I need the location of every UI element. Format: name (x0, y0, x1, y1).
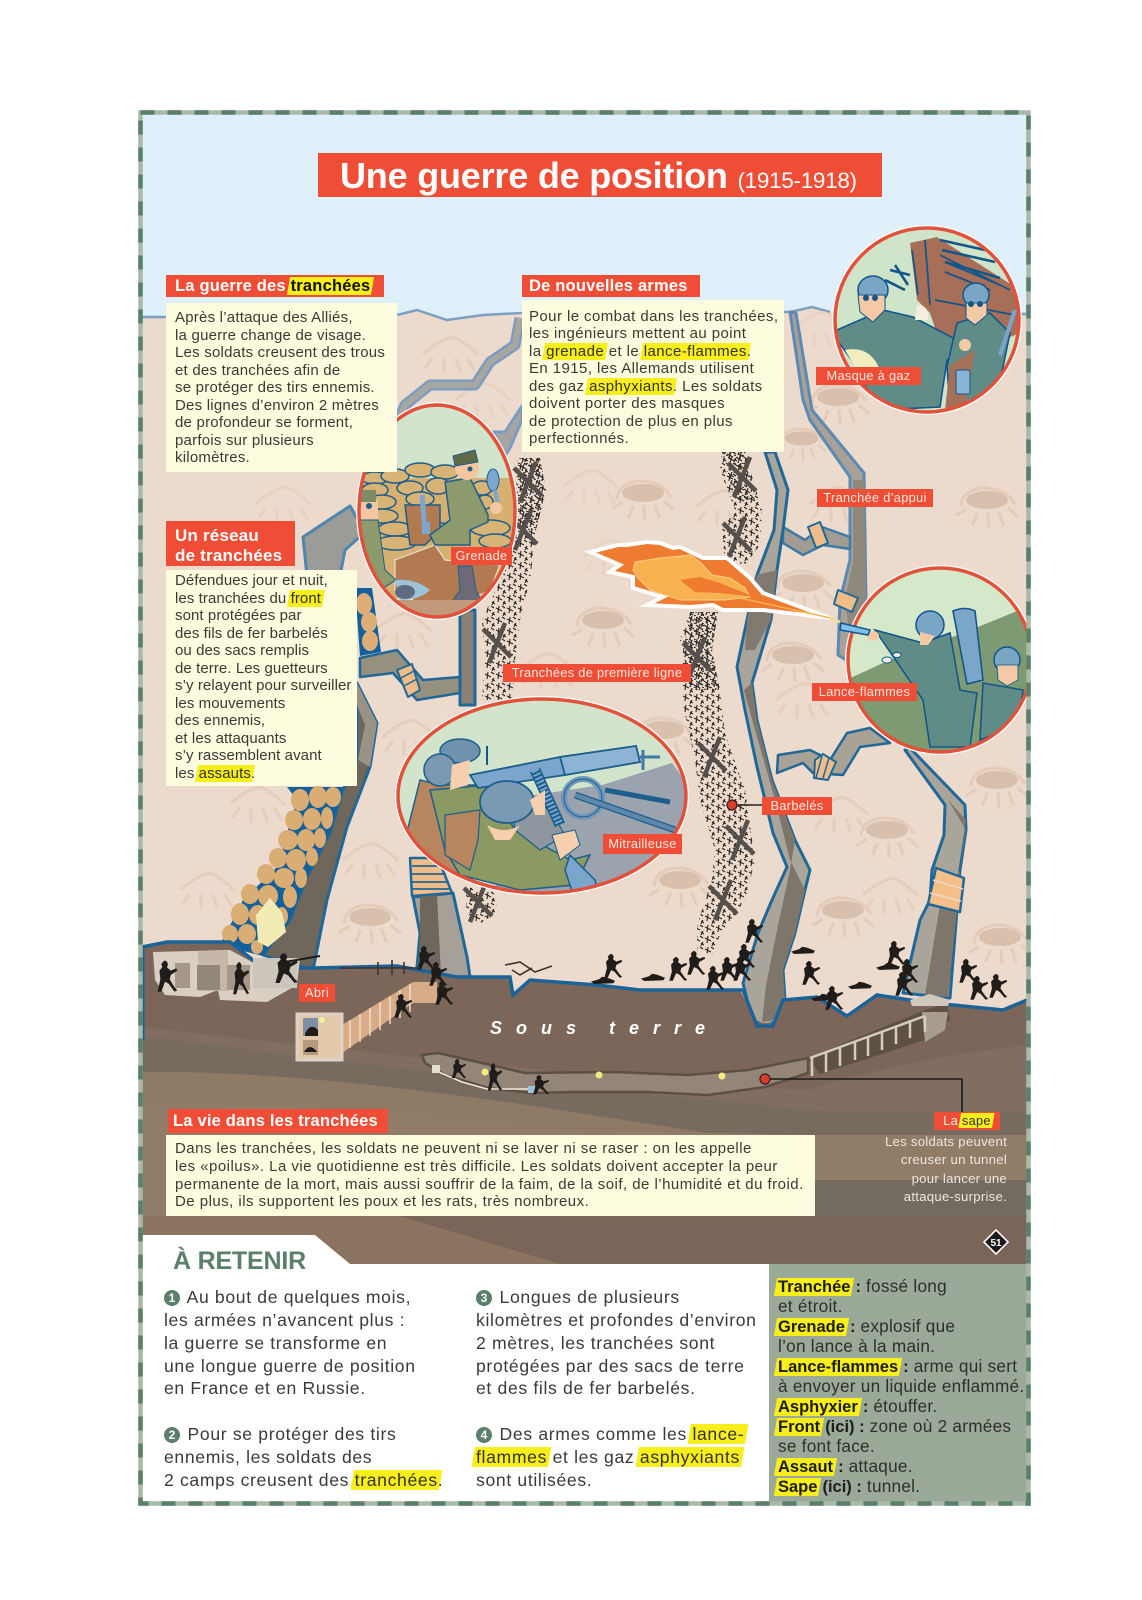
text block: la guerre des tranchées: la guerre change de visage. (175, 327, 366, 344)
soldiers on the battlefield (340, 919, 1007, 1010)
text block: retenir point 1: en France et en Russie. (164, 1378, 366, 1398)
label: mitrailleuse (603, 834, 682, 854)
text block: retenir point 4: 4 (481, 1428, 487, 1442)
text block: la guerre des tranchées: Les soldats creusent des trous (175, 344, 385, 361)
sky and soil (142, 114, 1027, 1020)
text block: la vie dans les tranchées: Dans les tranchées, les soldats ne peuvent ni se laver ni se raser : on les appelle (175, 1140, 752, 1157)
text block: retenir point 3: protégées par des sacs de terre (476, 1356, 745, 1376)
illustration: trench battlefield landscape (138, 110, 1032, 1506)
text block: de nouvelles armes: doivent porter des masques (529, 395, 725, 412)
barbed wire belts (464, 452, 762, 955)
text block: retenir point 4: flammes et les gaz asphyxiants (476, 1447, 740, 1467)
text block: retenir point 2 (164, 1424, 443, 1490)
text block: de nouvelles armes: En 1915, les Allemands utilisent (529, 360, 754, 377)
panel: glossary: Tranchée : fossé long (778, 1276, 947, 1296)
label: masque à gaz: Masque à gaz (826, 368, 910, 383)
title: Une guerre de position (1915-1918) (340, 155, 857, 196)
text block: retenir point 3: 2 mètres, les tranchées sont (476, 1333, 715, 1353)
vignette: machine gun (395, 695, 692, 900)
text block: retenir point 2: 2 (169, 1428, 175, 1442)
text block: retenir point 2: ennemis, les soldats des (164, 1447, 372, 1467)
panel: glossary: l’on lance à la main. (778, 1336, 935, 1356)
center long trench (737, 452, 810, 1026)
text block: un réseau de tranchées: ou des sacs remplis (175, 642, 309, 659)
white recap background (142, 1235, 1027, 1503)
text block: la vie dans les tranchées: permanente de la mort, mais aussi souffrir de la faim, de la soif, de l’humidité et du froid. (175, 1176, 804, 1193)
heading: à retenir: À RETENIR (173, 1247, 306, 1275)
text block: la guerre des tranchées: et des tranchées afin de (175, 362, 340, 379)
panel: glossary: et étroit. (778, 1296, 843, 1316)
text block: de nouvelles armes (522, 300, 784, 452)
label: tranchées de première ligne: Tranchées de première ligne (512, 665, 682, 680)
text block: un réseau de tranchées: des ennemis, (175, 712, 265, 729)
text block: un réseau de tranchées: s’y rassemblent avant (175, 747, 322, 764)
text block: un réseau de tranchées: de terre. Les guetteurs (175, 660, 328, 677)
panel: glossary: Asphyxier : étouffer. (778, 1396, 937, 1416)
callout line: barbelés (727, 800, 764, 810)
vignette: grenade (355, 400, 525, 625)
underground layers (142, 942, 1027, 1270)
text block: la guerre des tranchées: parfois sur plusieurs (175, 432, 314, 449)
text block: un réseau de tranchées: s’y relayent pour surveiller (175, 677, 351, 694)
text block: retenir point 1: une longue guerre de position (164, 1356, 416, 1376)
text block: retenir point 4: sont utilisées. (476, 1470, 592, 1490)
text block: sape explanation (885, 1134, 1007, 1204)
left sandbag trench (263, 683, 377, 970)
heading: de nouvelles armes: De nouvelles armes (529, 277, 688, 295)
panel: glossary: Sape (ici) : tunnel. (778, 1476, 920, 1496)
text block: retenir point 2: Pour se protéger des tirs (188, 1424, 396, 1444)
text block: la vie dans les tranchées: De plus, ils supportent les poux et les rats, très nombreux. (175, 1193, 589, 1210)
text block: la guerre des tranchées: de profondeur se forment, (175, 414, 353, 431)
text block: de nouvelles armes: les ingénieurs mettent au point (529, 325, 746, 342)
text block: de nouvelles armes: Pour le combat dans les tranchées, (529, 308, 778, 324)
label: abri (299, 984, 335, 1002)
heading: un réseau de tranchées: de tranchées (175, 546, 282, 565)
dashed frame (140, 112, 1028, 1504)
text block: retenir point 3: et des fils de fer barbelés. (476, 1378, 696, 1398)
text block: un réseau de tranchées: des fils de fer barbelés (175, 625, 328, 642)
text block: retenir point 3 (476, 1287, 757, 1398)
label: barbelés: Barbelés (771, 798, 823, 813)
text block: retenir point 1: la guerre se transforme en (164, 1333, 387, 1353)
text block: un réseau de tranchées (166, 570, 357, 786)
sape tunnel (422, 994, 950, 1095)
text block: retenir point 3: Longues de plusieurs (500, 1287, 680, 1307)
heading: la vie dans les tranchées: La vie dans les tranchées (173, 1112, 378, 1130)
text block: un réseau de tranchées: et les attaquants (175, 730, 286, 747)
shelter with stairs (297, 982, 437, 1060)
text block: retenir point 1: les armées n’avancent plus : (164, 1310, 405, 1330)
bunker with soldiers (153, 950, 320, 1002)
label: tranchée d'appui: Tranchée d’appui (823, 490, 927, 505)
text block: retenir point 3: kilomètres et profondes d’environ (476, 1310, 757, 1330)
text block: la vie dans les tranchées (166, 1135, 815, 1216)
text block: la guerre des tranchées (166, 303, 397, 472)
heading: un réseau de tranchées (166, 521, 295, 566)
panel: glossary: Assaut : attaque. (778, 1456, 913, 1476)
text block: de nouvelles armes: de protection de plus en plus (529, 413, 733, 430)
panel: glossary: se font face. (778, 1436, 875, 1456)
vignette: flamethrower (840, 560, 1035, 760)
text block: de nouvelles armes: perfectionnés. (529, 430, 629, 447)
label: la sape (934, 1112, 1000, 1130)
heading: un réseau de tranchées: Un réseau (175, 526, 259, 545)
text block: un réseau de tranchées: les tranchées du front (175, 590, 321, 607)
text block: retenir point 1 (164, 1287, 416, 1398)
craters (181, 313, 1030, 963)
panel: glossary: à envoyer un liquide enflammé. (778, 1376, 1024, 1396)
text block: un réseau de tranchées: Défendues jour et nuit, (175, 572, 328, 589)
heading: la vie dans les tranchées (168, 1109, 388, 1133)
text block: retenir point 2: 2 camps creusent des tranchées. (164, 1470, 443, 1490)
text block: sape explanation: creuser un tunnel (901, 1152, 1007, 1167)
text block: de nouvelles armes: des gaz asphyxiants. Les soldats (529, 378, 763, 395)
text block: la guerre des tranchées: se protéger des tirs ennemis. (175, 379, 375, 396)
text block: retenir point 1: Au bout de quelques mois, (187, 1287, 411, 1307)
panel: glossary (774, 1276, 1024, 1496)
label: abri: Abri (305, 985, 329, 1000)
text block: la vie dans les tranchées: les «poilus». La vie quotidienne est très difficile. Les soldats doivent accepter la peur (175, 1158, 778, 1175)
text block: un réseau de tranchées: sont protégées par (175, 607, 302, 624)
label: la sape: La sape (943, 1113, 991, 1128)
right trench (903, 748, 966, 998)
icon: page number diamond (984, 1230, 1008, 1254)
text block: la guerre des tranchées: Des lignes d’environ 2 mètres (175, 397, 379, 414)
label: masque à gaz (816, 367, 921, 385)
text block: de nouvelles armes: la grenade et le lance-flammes. (529, 343, 751, 360)
panel: glossary: Grenade : explosif que (778, 1316, 955, 1336)
text block: sape explanation: attaque-surprise. (904, 1189, 1007, 1204)
text block: un réseau de tranchées: les assauts. (175, 765, 255, 782)
text block: un réseau de tranchées: les mouvements (175, 695, 285, 712)
panel: glossary: Lance-flammes : arme qui sert (778, 1356, 1017, 1376)
trench sandbag blocks (808, 522, 828, 548)
label: barbelés (762, 797, 832, 815)
text block: la guerre des tranchées: Après l’attaque des Alliés, (175, 309, 353, 326)
label: grenade: Grenade (456, 548, 507, 563)
far right trench (790, 312, 866, 660)
text block: sape explanation: pour lancer une (912, 1171, 1007, 1186)
text block: sape explanation: Les soldats peuvent (885, 1134, 1007, 1149)
trenches (220, 312, 966, 1026)
text block: la guerre des tranchées: kilomètres. (175, 449, 250, 466)
label: lance-flammes: Lance-flammes (819, 684, 910, 699)
flame of the flamethrower (590, 542, 840, 622)
vignette: gas mask (830, 225, 1025, 420)
vertical trench (460, 610, 475, 705)
text block: retenir point 4: Des armes comme les lance- (500, 1424, 744, 1444)
text block: retenir point 1: 1 (169, 1291, 175, 1305)
icon: page number diamond: 51 (990, 1238, 1002, 1249)
label: sous terre: Sous terre (490, 1018, 719, 1038)
label: mitrailleuse: Mitrailleuse (608, 836, 677, 851)
heading: la guerre des tranchées: La guerre des tranchées (175, 277, 370, 295)
text block: retenir point 4 (472, 1424, 748, 1490)
text block: retenir point 3: 3 (481, 1291, 487, 1305)
panel: glossary: Front (ici) : zone où 2 armées (778, 1416, 1011, 1436)
callout line: sape (760, 1074, 962, 1112)
